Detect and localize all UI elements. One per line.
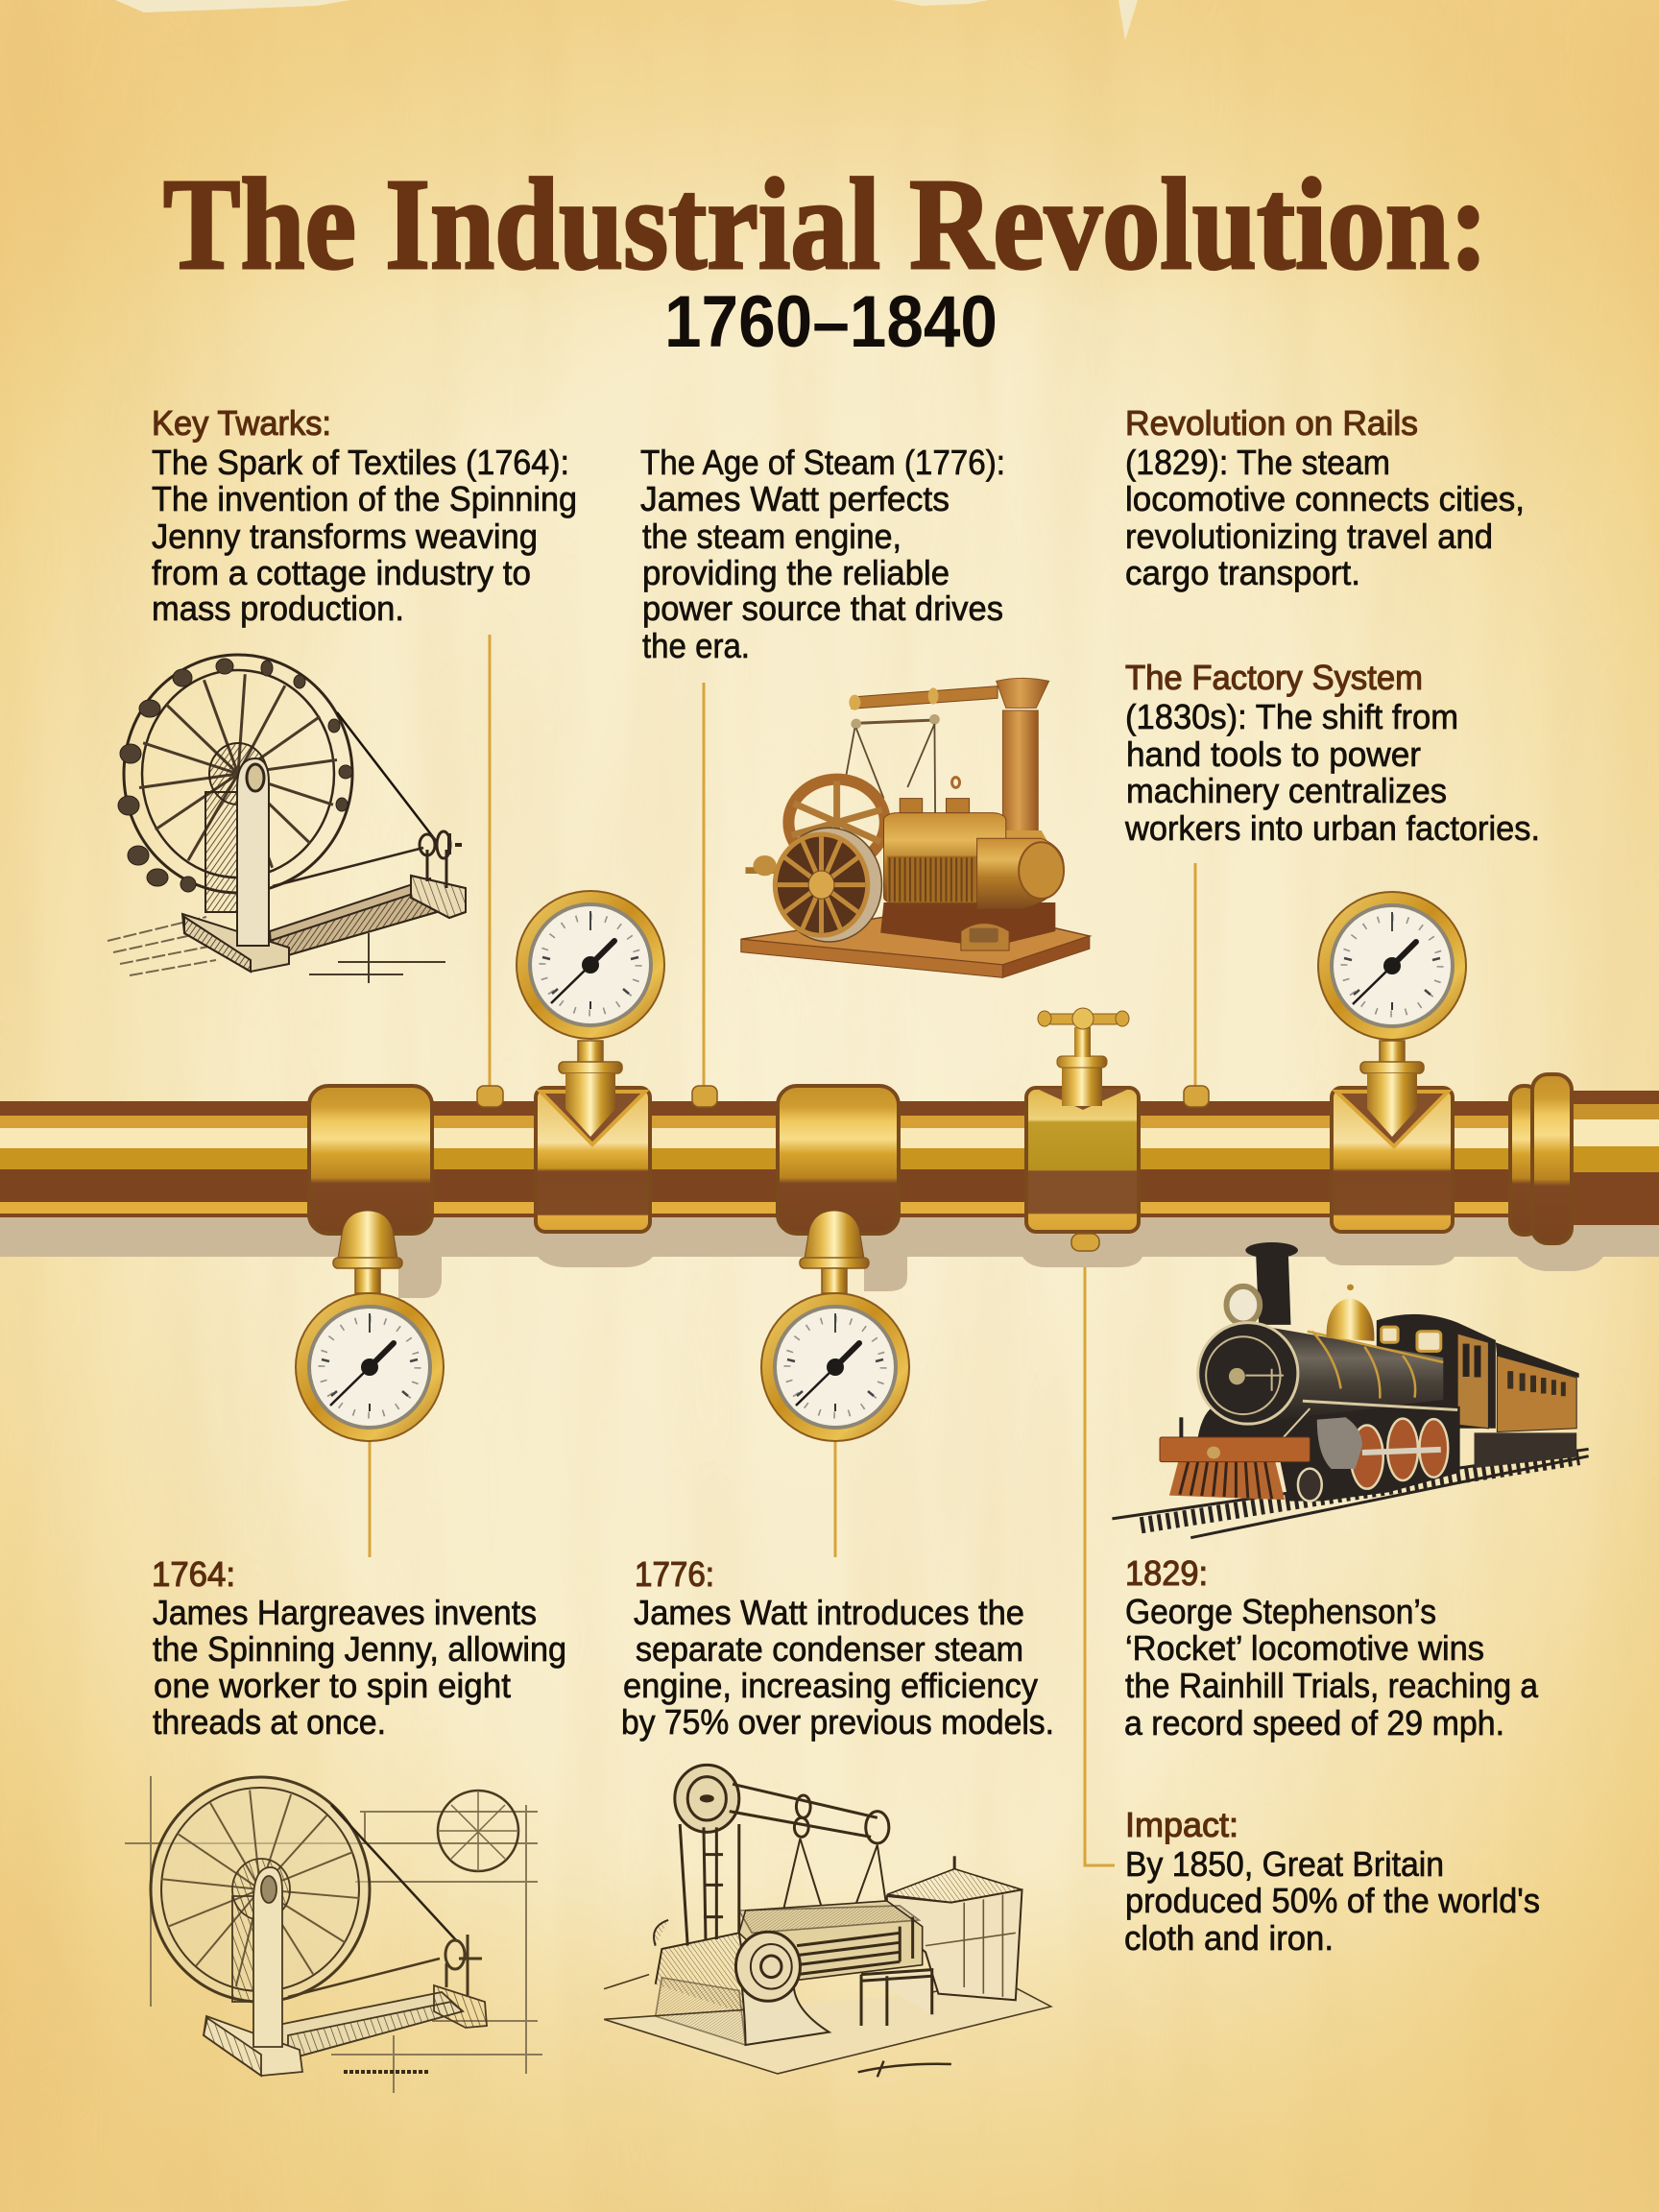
body: spark of textiles xyxy=(152,443,577,628)
fitting: collar 1 xyxy=(309,1086,432,1234)
ladder tower xyxy=(680,1824,739,1946)
text block: 1764 xyxy=(152,1554,566,1742)
body: impact: By 1850, Great Britain xyxy=(1125,1844,1444,1884)
cylinders xyxy=(654,1901,923,2045)
body: revolution on rails xyxy=(1125,443,1525,592)
text block: impact xyxy=(1124,1805,1540,1958)
text block: age of steam: the steam engine, xyxy=(642,517,902,556)
body: spark of textiles: The Spark of Textiles (1764): xyxy=(152,443,569,482)
gauge: top left xyxy=(516,890,665,1137)
body: factory system: workers into urban factories. xyxy=(1124,808,1540,848)
heading: the factory system: The Factory System xyxy=(1125,658,1423,697)
stud: age of steam xyxy=(692,1086,717,1107)
text block: age of steam: James Watt perfects xyxy=(640,479,950,518)
body: impact xyxy=(1124,1844,1540,1958)
text block: age of steam xyxy=(640,443,1005,665)
gauge: top right xyxy=(1317,891,1467,1137)
locomotive cowcatcher xyxy=(1160,1417,1310,1500)
subtitle: 1760–1840 xyxy=(664,281,998,363)
body: factory system xyxy=(1124,697,1540,848)
text block: 1776 xyxy=(621,1554,1054,1742)
body: revolution on rails: (1829): The steam xyxy=(1125,443,1390,482)
locomotive chassis xyxy=(1198,1400,1460,1502)
body: 1829: ‘Rocket’ locomotive wins xyxy=(1125,1628,1484,1668)
parchment top tone xyxy=(0,0,1659,317)
railway track xyxy=(1112,1449,1589,1538)
body: 1776: James Watt introduces the xyxy=(634,1593,1024,1632)
locomotive boiler xyxy=(1198,1285,1457,1437)
text block: age of steam: providing the reliable xyxy=(642,553,950,592)
heading: revolution on rails: Revolution on Rails xyxy=(1125,403,1418,443)
body: 1764 xyxy=(153,1593,566,1742)
body: revolution on rails: revolutionizing travel and xyxy=(1125,517,1493,556)
locomotive cylinder xyxy=(1317,1417,1441,1469)
body: revolution on rails: cargo transport. xyxy=(1125,553,1360,592)
heading: 1776: 1776: xyxy=(635,1554,714,1594)
heading: 1764: 1764: xyxy=(152,1554,235,1594)
body: factory system: machinery centralizes xyxy=(1126,771,1447,810)
body: 1829 xyxy=(1124,1592,1539,1743)
connector line: age of steam xyxy=(703,683,705,1090)
heading: key twarks: Key Twarks: xyxy=(152,403,331,443)
body: 1764: James Hargreaves invents xyxy=(153,1593,537,1632)
pipe shadow xyxy=(0,1215,1659,1298)
body: 1776: by 75% over previous models. xyxy=(621,1702,1054,1742)
fitting: gauge tee 1 xyxy=(536,1088,650,1232)
gauge: bottom left xyxy=(295,1211,445,1442)
heading: impact: Impact: xyxy=(1125,1805,1238,1844)
locomotive cab xyxy=(1377,1314,1496,1429)
body: factory system: (1830s): The shift from xyxy=(1125,697,1458,736)
engine boiler xyxy=(884,778,1064,909)
body: spark of textiles: from a cottage industry to xyxy=(152,553,531,592)
body: 1829: George Stephenson’s xyxy=(1125,1592,1436,1631)
body: 1829: a record speed of 29 mph. xyxy=(1124,1703,1504,1743)
gauge: bottom right xyxy=(760,1211,910,1442)
fitting: gauge tee 2 xyxy=(1332,1088,1453,1232)
locomotive chimney xyxy=(1226,1242,1298,1325)
engine house xyxy=(887,1856,1022,2000)
parchment bottom tone xyxy=(0,1872,1659,2212)
stud: factory system xyxy=(1184,1086,1209,1107)
beam and pulley xyxy=(675,1765,889,1911)
body: spark of textiles: Jenny transforms weaving xyxy=(152,517,538,556)
body: impact: cloth and iron. xyxy=(1124,1918,1334,1958)
fitting: valve block xyxy=(1026,1088,1139,1232)
floor xyxy=(604,1975,1051,2074)
body: revolution on rails: locomotive connects cities, xyxy=(1125,479,1525,518)
text block: revolution on rails xyxy=(1125,403,1525,592)
body: factory system: hand tools to power xyxy=(1126,734,1421,774)
body: 1764: one worker to spin eight xyxy=(154,1666,511,1705)
connector line: impact elbow xyxy=(1085,1243,1115,1865)
locomotive wheels xyxy=(1298,1419,1448,1502)
valve handle xyxy=(1038,1008,1129,1106)
body: 1764: threads at once. xyxy=(153,1702,386,1742)
fitting: collar 2 xyxy=(778,1086,899,1234)
text block: key tweaks, spark of textiles xyxy=(152,403,577,628)
body: 1829: the Rainhill Trials, reaching a xyxy=(1125,1666,1539,1705)
body: 1776 xyxy=(621,1593,1054,1742)
text block: age of steam: The Age of Steam (1776): xyxy=(640,443,1005,482)
torn paper edges xyxy=(115,0,1138,40)
body: 1776: engine, increasing efficiency xyxy=(623,1666,1038,1705)
brass pipe xyxy=(0,1091,1659,1225)
title: The Industrial Revolution: xyxy=(163,153,1488,297)
engine rear flywheel xyxy=(788,780,885,866)
engine front wheel xyxy=(745,828,1009,950)
body: spark of textiles: The invention of the Spinning xyxy=(152,479,577,518)
connector line: spark of textiles xyxy=(488,635,492,1090)
text block: age of steam: power source that drives xyxy=(642,589,1003,628)
text block: age of steam: the era. xyxy=(642,626,750,665)
text block: factory system xyxy=(1124,658,1540,848)
small stand xyxy=(861,1970,932,2026)
engine chimney and beam xyxy=(845,678,1049,842)
icon: steam locomotive xyxy=(1112,1242,1589,1538)
connector line: 1776 xyxy=(833,1435,837,1557)
icon: steam engine, brass xyxy=(741,678,1090,977)
connector line: 1764 xyxy=(369,1435,371,1557)
icon: spinning jenny blueprint sketch xyxy=(125,1776,542,2093)
body: 1776: separate condenser steam xyxy=(636,1629,1023,1669)
body: spark of textiles: mass production. xyxy=(152,589,404,628)
icon: spinning wheel, inked xyxy=(108,655,466,983)
connector line: factory system xyxy=(1194,863,1196,1090)
stud: spark of textiles xyxy=(477,1086,503,1107)
engine base xyxy=(741,905,1090,977)
body: 1764: the Spinning Jenny, allowing xyxy=(153,1629,566,1669)
icon: steam engine blueprint sketch xyxy=(604,1765,1051,2077)
tender carriage xyxy=(1475,1342,1579,1468)
stud: valve bottom xyxy=(1071,1234,1099,1251)
fitting: pipe end flange xyxy=(1510,1074,1572,1243)
body: impact: produced 50% of the world's xyxy=(1125,1881,1540,1920)
text block: 1829 xyxy=(1124,1553,1539,1743)
heading: 1829: 1829: xyxy=(1125,1553,1208,1593)
